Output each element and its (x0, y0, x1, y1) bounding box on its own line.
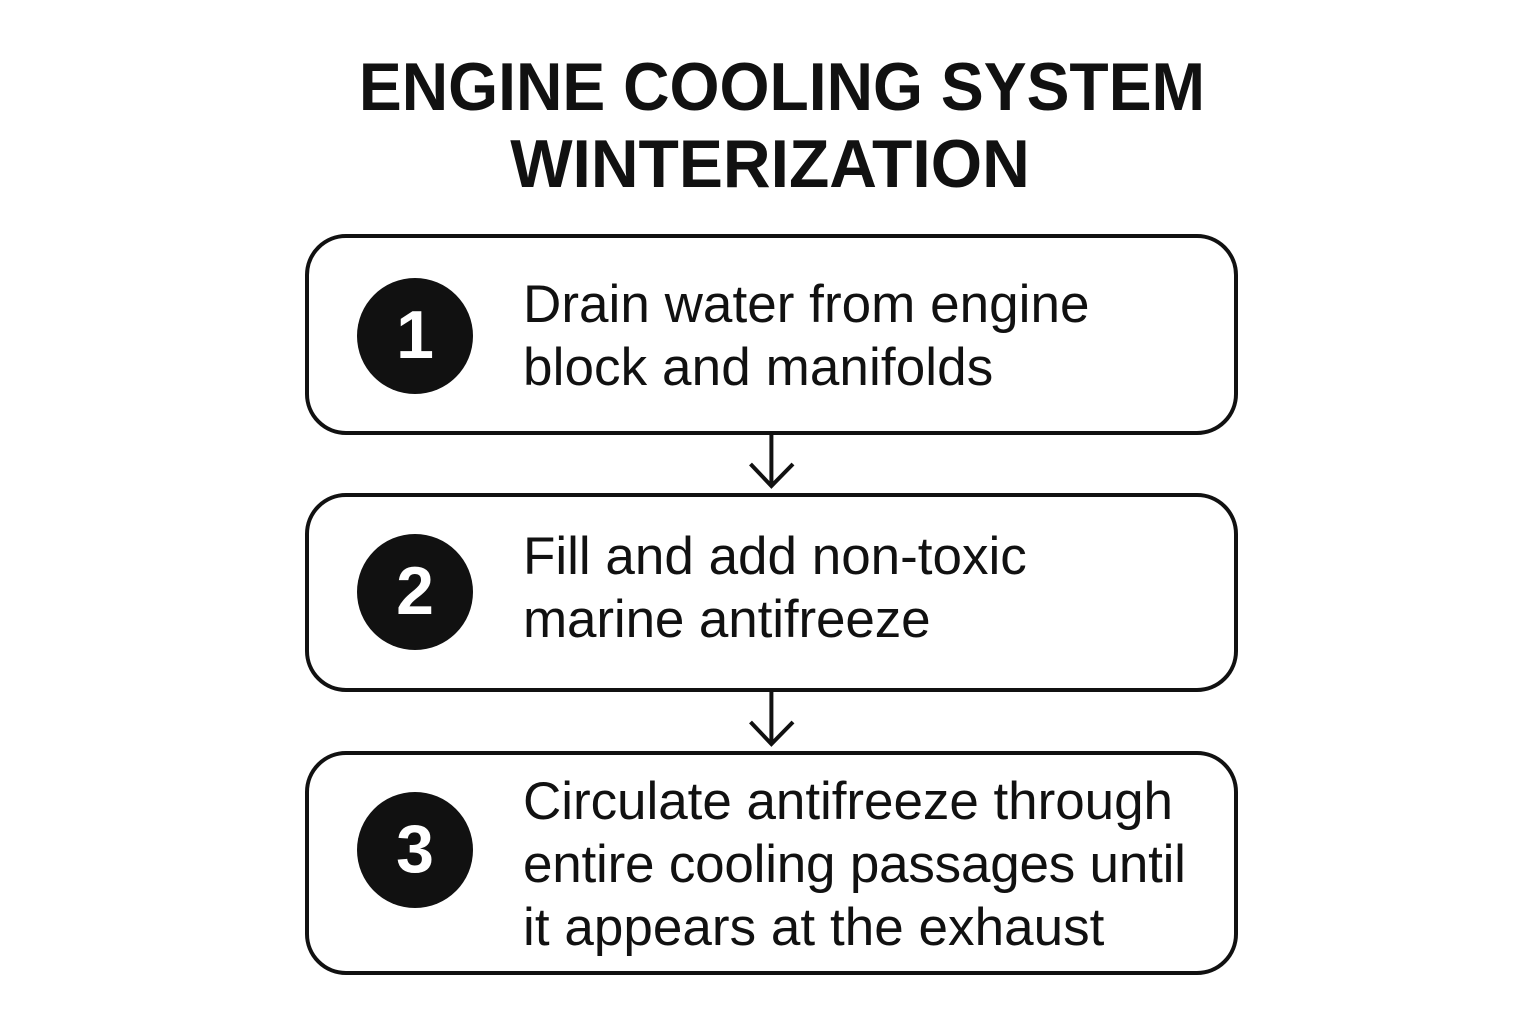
step 2 number badge: 2 (396, 553, 434, 629)
step 3 number badge (357, 792, 473, 908)
step 1 panel (305, 234, 1238, 435)
step 3 text: Circulate antifreeze through (523, 772, 1173, 831)
step 3 number badge: 3 (396, 811, 434, 887)
step 2 text: Fill and add non-toxic (523, 527, 1027, 586)
step 3 text: entire cooling passages until (523, 835, 1186, 894)
step 1 number badge (357, 278, 473, 394)
step 1 number badge: 1 (396, 297, 434, 373)
title: ENGINE COOLING SYSTEM (359, 49, 1205, 125)
step 1 text: block and manifolds (523, 338, 993, 397)
step 2 panel (305, 493, 1238, 692)
arrow: step 1 to step 2 (749, 435, 794, 489)
step 3 panel (305, 751, 1238, 975)
step 1 text: Drain water from engine (523, 275, 1090, 334)
arrow: step 2 to step 3 (749, 692, 794, 747)
step 2 text: marine antifreeze (523, 590, 930, 649)
step 3 text (523, 772, 1186, 957)
step 3 text: it appears at the exhaust (523, 898, 1104, 957)
step 1 text (523, 275, 1090, 397)
step 2 text (523, 527, 1027, 649)
title (359, 49, 1205, 202)
step 2 number badge (357, 534, 473, 650)
title: WINTERIZATION (510, 126, 1030, 202)
